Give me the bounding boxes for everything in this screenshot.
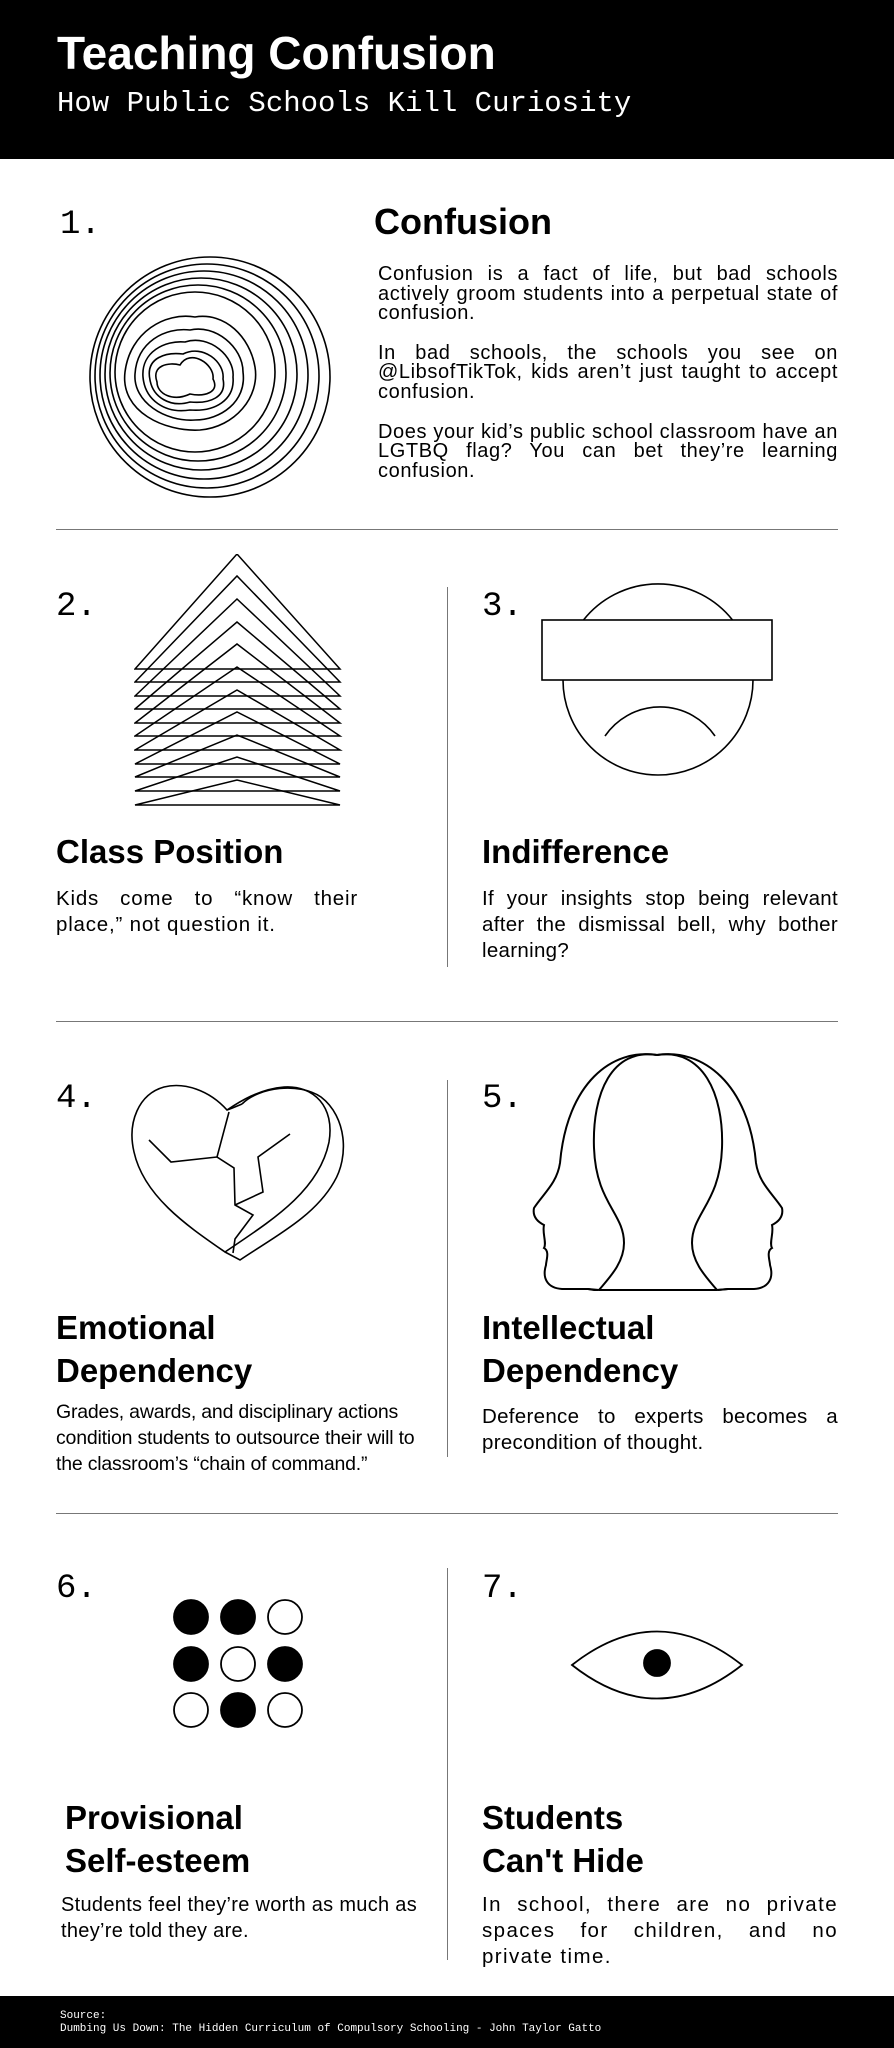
number 6: 6.: [56, 1570, 97, 1608]
heading: Students Can't Hide: Students: [482, 1799, 623, 1836]
heading: Emotional Dependency: Dependency: [56, 1352, 252, 1389]
heading: Provisional Self-esteem: Provisional: [65, 1799, 243, 1836]
number 7: 7.: [482, 1570, 523, 1608]
text: intellectual dependency: Deference to experts becomes a precondition of thought.: [482, 1405, 838, 1454]
icon: dot grid: [173, 1599, 303, 1728]
number 5: 5.: [482, 1080, 523, 1118]
footer: source: [0, 1996, 894, 2048]
title: Teaching Confusion: [57, 27, 496, 79]
text: students can't hide: In school, there are no private spaces for children, and no private time.: [482, 1893, 838, 1968]
text: confusion: In bad schools, the schools you see on @LibsofTikTok, kids aren’t just taught to accept confusion.: [378, 342, 838, 403]
section 5: intellectual dependency: [482, 1053, 838, 1454]
heading: Emotional Dependency: [56, 1309, 252, 1389]
header: [0, 0, 894, 159]
section 3: indifference: [482, 583, 838, 962]
heading: Emotional Dependency: Emotional: [56, 1309, 216, 1346]
icon: eye: [570, 1630, 744, 1700]
icon: broken heart: [131, 1084, 344, 1261]
icon: stacked triangles: [134, 554, 343, 806]
number 1: 1.: [60, 206, 101, 244]
section 6: provisional self-esteem: [56, 1570, 417, 1942]
icon: blindfolded sad face: [541, 583, 773, 776]
number 2: 2.: [56, 588, 97, 626]
text: confusion: Does your kid’s public school classroom have an LGTBQ flag? You can bet they’re learning confusion.: [378, 421, 838, 482]
section 1: confusion: [60, 201, 838, 482]
footer: source: Dumbing Us Down: The Hidden Curriculum of Compulsory Schooling - John Taylor Gatto: [60, 2023, 601, 2035]
heading: Provisional Self-esteem: Self-esteem: [65, 1842, 250, 1879]
section 2: class position: [56, 554, 358, 936]
text: class position: Kids come to “know their place,” not question it.: [56, 887, 358, 936]
heading: Confusion: Confusion: [374, 201, 552, 242]
number 4: 4.: [56, 1080, 97, 1118]
icon: two heads: [532, 1053, 784, 1291]
heading: Intellectual Dependency: [482, 1309, 678, 1389]
heading: Intellectual Dependency: Dependency: [482, 1352, 678, 1389]
section 4: emotional dependency: [56, 1080, 414, 1475]
text: indifference: If your insights stop being relevant after the dismissal bell, why bother learning?: [482, 887, 838, 962]
text: confusion: Confusion is a fact of life, but bad schools actively groom students into a perpetual state of confusion.: [378, 263, 838, 324]
heading: Students Can't Hide: [482, 1799, 644, 1879]
text: provisional self-esteem: Students feel they’re worth as much as they’re told they are.: [61, 1894, 417, 1942]
section 7: students can't hide: [482, 1570, 838, 1968]
text: emotional dependency: Grades, awards, and disciplinary actions condition students to outsource their will to the classroom’s “chain of command.”: [56, 1401, 414, 1475]
heading: Intellectual Dependency: Intellectual: [482, 1309, 654, 1346]
subtitle: How Public Schools Kill Curiosity: [57, 87, 631, 120]
heading: Indifference: Indifference: [482, 833, 669, 870]
text: confusion: [378, 263, 838, 482]
footer: source: Source:: [60, 2010, 106, 2022]
number 3: 3.: [482, 588, 523, 626]
icon: concentric circles: [89, 256, 331, 498]
heading: Class Position: Class Position: [56, 833, 283, 870]
heading: Provisional Self-esteem: [65, 1799, 250, 1879]
heading: Students Can't Hide: Can't Hide: [482, 1842, 644, 1879]
